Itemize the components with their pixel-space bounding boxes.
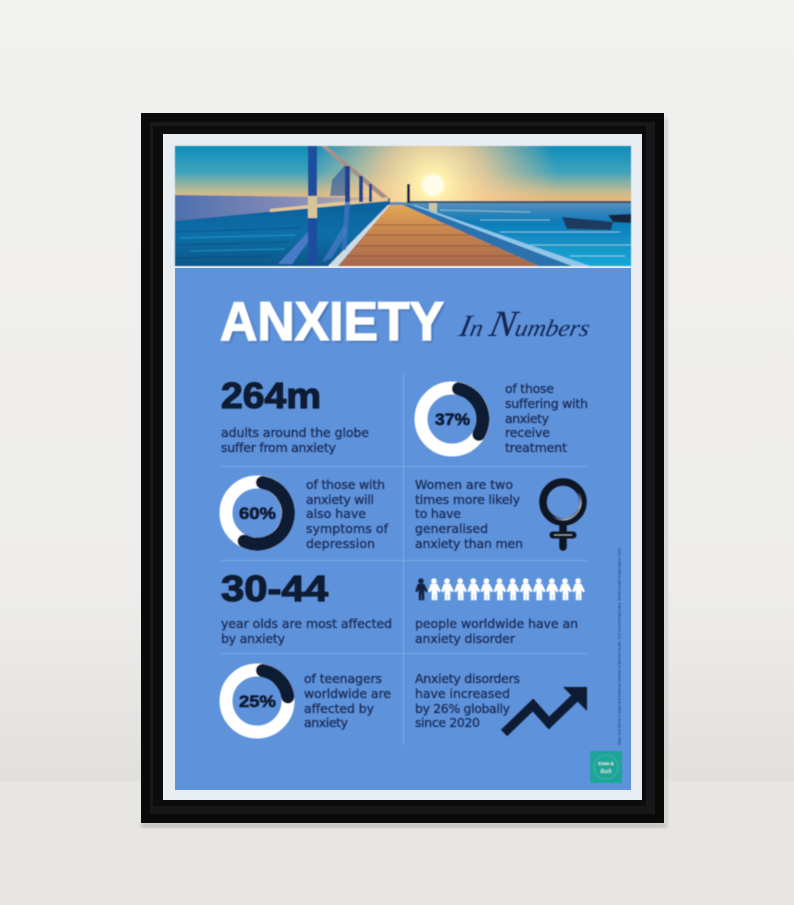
pictogram: 1 in 13 people	[416, 578, 585, 600]
donut: 25%	[226, 670, 288, 732]
text: women two times more likely: Women are two	[415, 477, 513, 492]
text: adults around the globe: adults around the globe	[221, 425, 369, 440]
text: women two times more likely	[415, 477, 523, 551]
stat: 30-44: 30-44	[221, 568, 328, 609]
text: women two times more likely: anxiety than men	[415, 536, 523, 551]
text: of teenagers: worldwide are	[304, 686, 391, 701]
text: of teenagers: of teenagers	[304, 671, 382, 686]
text: people worldwide	[415, 616, 578, 646]
text: women two times more likely: to have	[415, 506, 461, 521]
text: adults around the globe	[221, 425, 369, 455]
text: of those suffering: of those	[505, 381, 554, 396]
text: anxiety disorders increased: Anxiety disorders	[415, 671, 520, 686]
donut: 60%	[226, 482, 288, 544]
text: of those with anxiety: symptoms of	[306, 521, 389, 536]
text: people worldwide: anxiety disorder	[415, 631, 516, 646]
text: of those with anxiety: anxiety will	[306, 492, 374, 507]
subtitle: In Numbers: In Numbers	[455, 304, 595, 345]
donut: 37%	[421, 388, 483, 450]
text: of those suffering	[505, 381, 588, 455]
text: year olds: by anxiety	[221, 631, 286, 646]
poster mat	[163, 134, 642, 800]
text: anxiety disorders increased: by 26% globally	[415, 701, 511, 716]
text: of those suffering: suffering with	[505, 396, 588, 411]
text: anxiety disorders increased: since 2020	[415, 715, 480, 730]
text: of those suffering: anxiety	[505, 411, 550, 426]
logo badge: Cove &	[598, 761, 614, 766]
text: anxiety disorders increased: have increased	[415, 686, 510, 701]
text: women two times more likely: times more likely	[415, 492, 521, 507]
donut: 60%: 60%	[239, 504, 276, 523]
stat: 264m: 264m	[221, 375, 321, 416]
text: women two times more likely: generalised	[415, 521, 488, 536]
text: of those suffering: treatment	[505, 440, 567, 455]
poster content	[220, 290, 622, 783]
text: of those with anxiety: depression	[306, 536, 375, 551]
title: ANXIETY: ANXIETY	[222, 292, 446, 354]
picture frame	[141, 113, 668, 828]
blue poster panel	[175, 268, 631, 790]
grid dividers	[221, 374, 587, 745]
floor surface	[0, 781, 794, 905]
text: of those with anxiety: of those with	[306, 477, 385, 492]
title: ANXIETY: ANXIETY	[220, 290, 444, 352]
text: of those with anxiety	[306, 477, 389, 551]
donut: 25%: 25%	[239, 692, 276, 711]
text: people worldwide: people worldwide have an	[415, 616, 578, 631]
text: of teenagers: affected by	[304, 701, 375, 716]
text: of teenagers: anxiety	[304, 715, 349, 730]
icon: female symbol	[543, 482, 583, 547]
text: of those suffering: receive	[505, 425, 550, 440]
logo badge	[590, 751, 622, 783]
source note vertical text: Data: Our World in Data and National Institute of Mental Health, The Lancet Psychiatry, World Health Organisation 2021	[618, 548, 622, 745]
text: of those with anxiety: also have	[306, 506, 366, 521]
icon: rising arrow	[504, 687, 587, 733]
logo badge: Ruth	[599, 769, 612, 775]
text: year olds	[221, 616, 392, 646]
text: anxiety disorders increased	[415, 671, 520, 730]
photo: jetty at sunset	[175, 146, 631, 266]
text: adults around the globe: suffer from anxiety	[221, 440, 337, 455]
donut: 37%: 37%	[435, 410, 470, 429]
text: of teenagers	[304, 671, 391, 730]
text: year olds: year olds are most affected	[221, 616, 392, 631]
